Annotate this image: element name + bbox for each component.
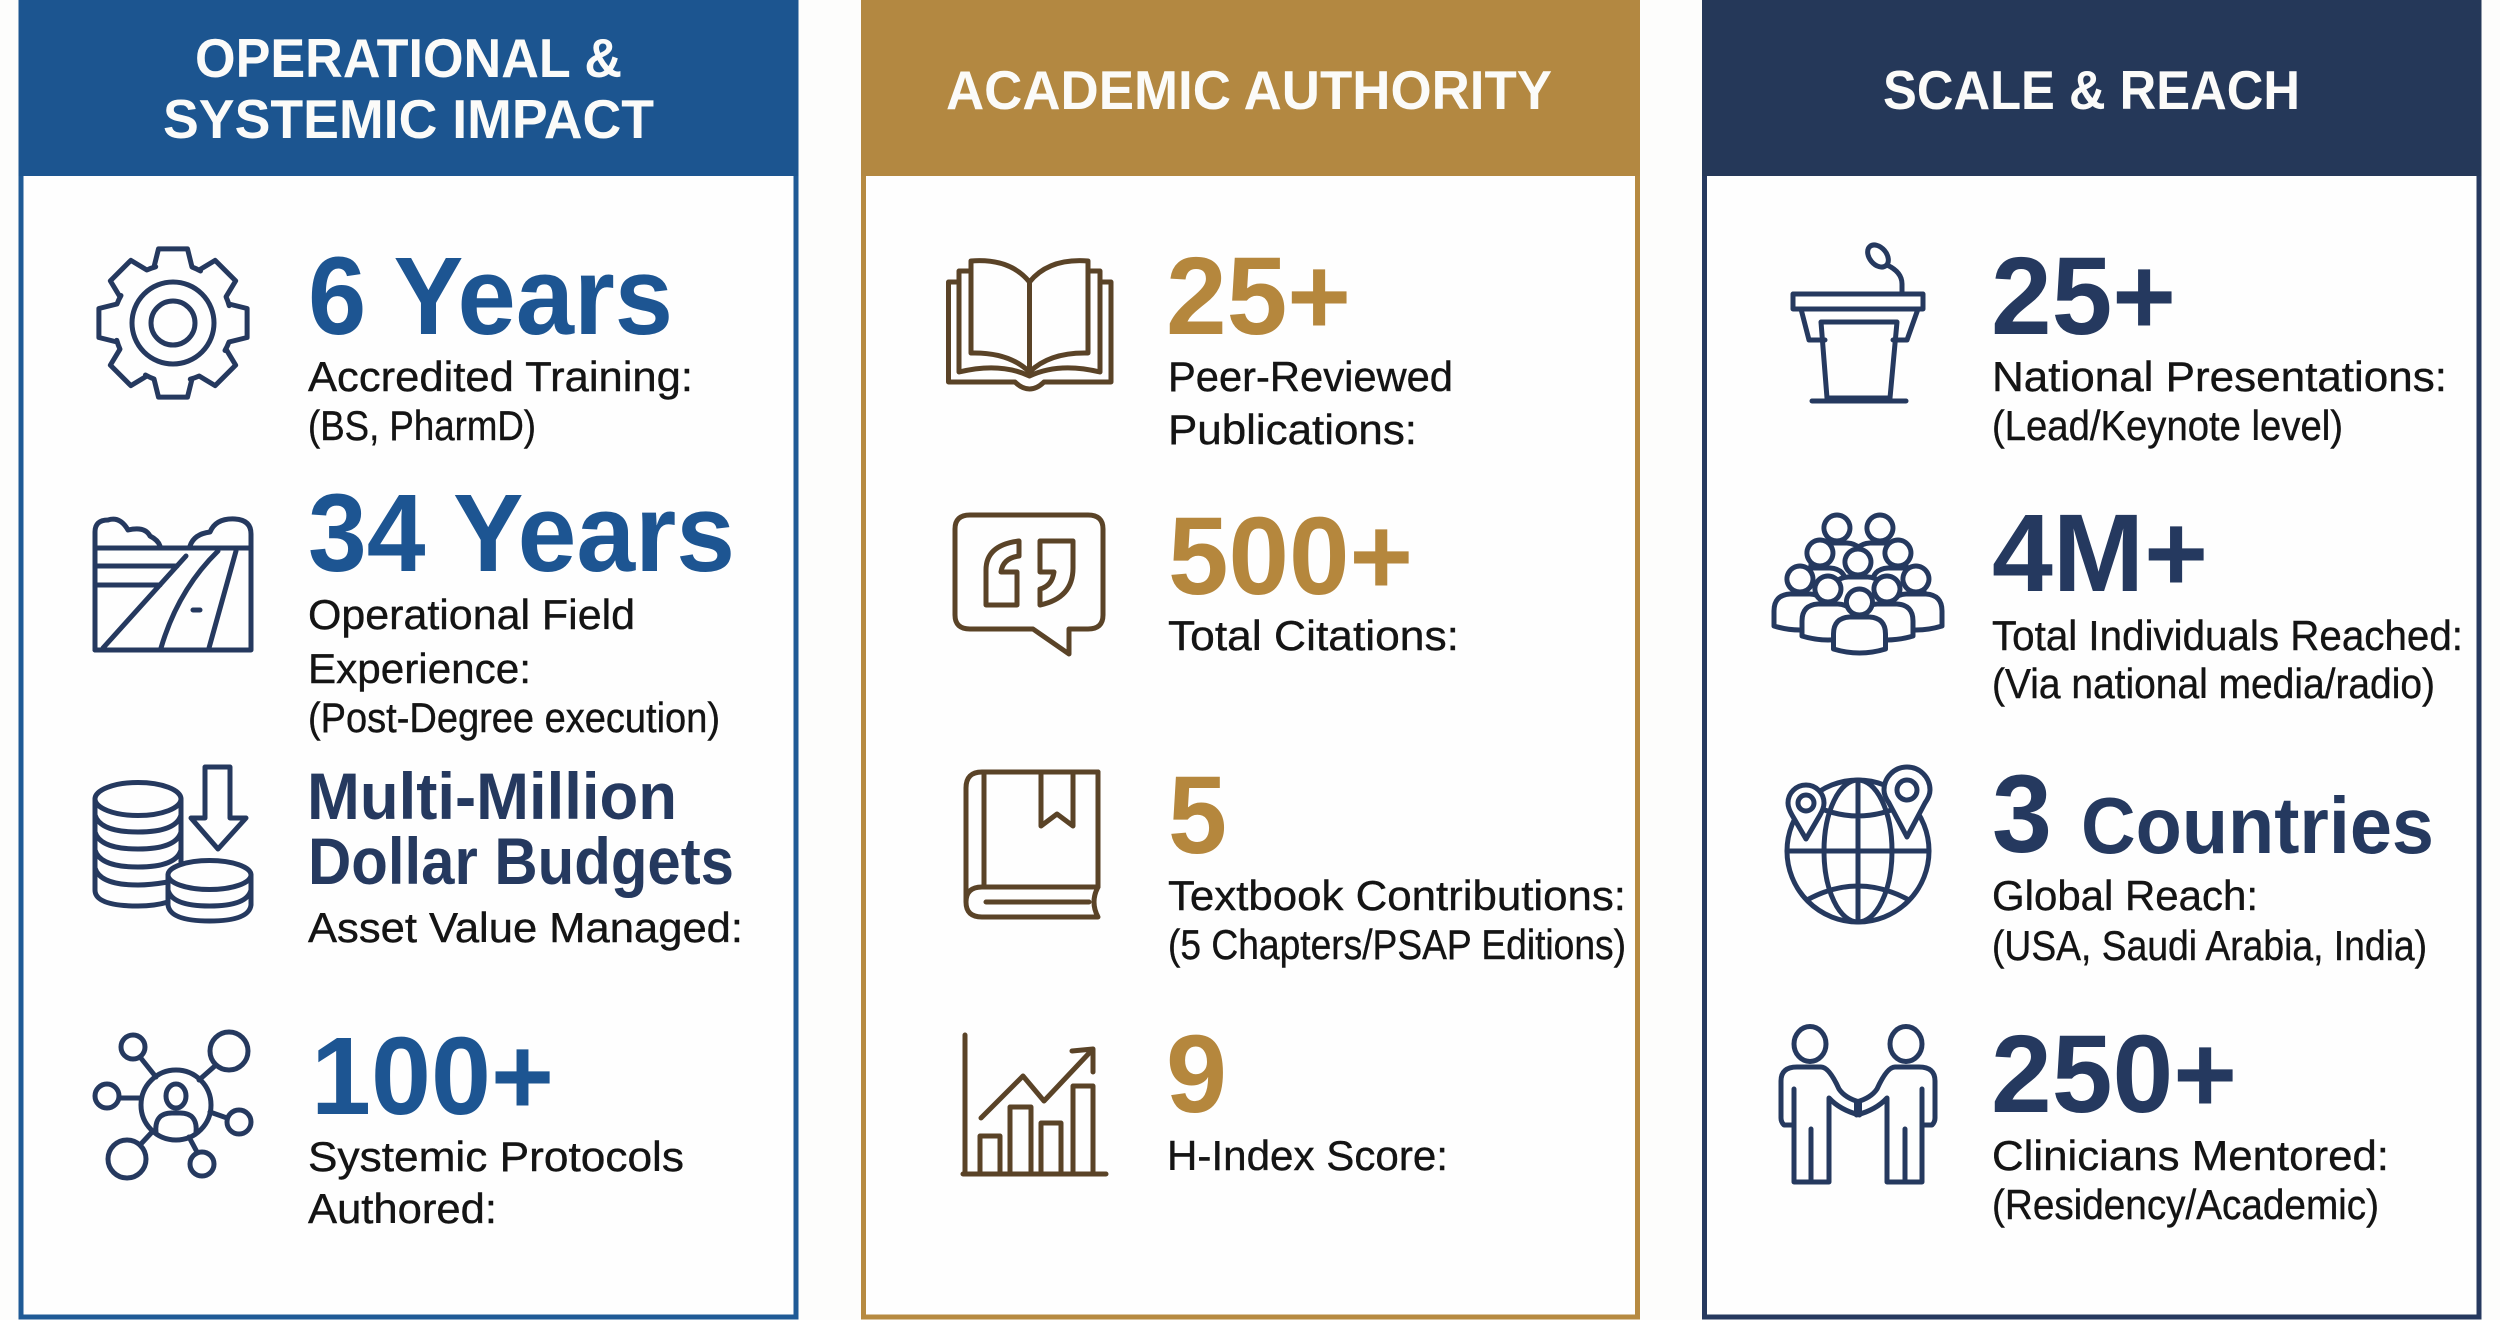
big number: 3 Countries: Countries: [2081, 781, 2434, 870]
label: accredited training: Accredited Training:: [308, 353, 693, 400]
label: peer-reviewed publications: Peer-Reviewed: [1168, 353, 1453, 400]
label: national presentations: (Lead/Keynote level): [1992, 402, 2343, 449]
big number: 34 Years: 34 Years: [308, 472, 735, 595]
stat: 500+ citations: [955, 495, 1459, 659]
label: operational field experience: Operational Field: [308, 591, 635, 638]
label: textbook contributions: Textbook Contributions:: [1168, 872, 1626, 919]
label: national presentations: National Presentations:: [1992, 353, 2447, 400]
big number: 100+: 100+: [311, 1015, 554, 1138]
stat: 5 textbook contributions: [966, 754, 1626, 968]
stat: 4M+ individuals: [1774, 492, 2463, 707]
label: textbook contributions: [1168, 872, 1626, 968]
label: operational field experience: [308, 591, 720, 741]
icon: two people shaking hands: [1781, 1026, 1935, 1182]
stat: 100+ systemic protocols: [95, 1015, 684, 1232]
icon: globe with map pins: [1787, 767, 1930, 922]
big number: 3 Countries: 3: [1992, 753, 2052, 876]
stat: 3 countries: [1787, 753, 2434, 969]
label: asset value managed: Asset Value Managed:: [308, 904, 743, 951]
icon: rising bar chart: [963, 1035, 1106, 1174]
stat: 6 years accredited training: [99, 235, 693, 449]
stat: 250+ clinicians: [1781, 1013, 2389, 1228]
icon: gear: [99, 249, 247, 397]
icon: open book: [948, 261, 1111, 389]
label: clinicians mentored: Clinicians Mentored:: [1992, 1132, 2389, 1179]
stat: 25+ presentations: [1793, 235, 2447, 449]
icon: crowd of people: [1774, 515, 1942, 653]
label: total citations: Total Citations:: [1168, 612, 1459, 659]
big number: 4M+: 4M+: [1992, 492, 2208, 615]
big number: 6 Years: 6 Years: [308, 235, 673, 358]
stat: 9 h-index: [963, 1013, 1448, 1179]
big number: 9: 9: [1166, 1013, 1227, 1136]
panel: scale and reach: [1702, 0, 2482, 1317]
big number: 3 Countries: [1992, 753, 2434, 876]
stat: 34 years field experience: [95, 472, 735, 741]
icon: quote speech bubble: [955, 515, 1103, 654]
icon: podium with microphone: [1793, 241, 1923, 401]
big number: multi-million dollar budgets: Dollar Budgets: [308, 824, 734, 898]
label: accredited training: (BS, PharmD): [308, 402, 536, 449]
icon: network with person: [95, 1032, 251, 1178]
stat: multi-million dollar budgets: [95, 759, 743, 951]
label: accredited training: [308, 353, 693, 449]
icon: road landscape: [95, 519, 251, 650]
label: h-index score: H-Index Score:: [1167, 1132, 1448, 1179]
heading: operational and systemic impact: SYSTEMIC IMPACT: [163, 88, 654, 150]
big number: 25+: 25+: [1166, 235, 1351, 358]
heading: scale and reach: SCALE & REACH: [1883, 59, 2300, 121]
label: textbook contributions: (5 Chapters/PSAP Editions): [1168, 921, 1626, 968]
label: operational field experience: (Post-Degree execution): [308, 694, 720, 741]
heading: academic authority: [861, 0, 1640, 176]
icon: closed book with bookmark: [966, 772, 1098, 917]
heading: operational and systemic impact: OPERATIONAL &: [195, 27, 622, 89]
label: total individuals reached: (Via national media/radio): [1992, 660, 2435, 707]
big number: 500+: 500+: [1168, 495, 1413, 618]
label: total individuals reached: Total Individuals Reached:: [1992, 612, 2463, 659]
label: global reach: Global Reach:: [1992, 872, 2258, 919]
big number: 250+: 250+: [1991, 1013, 2237, 1136]
big number: multi-million dollar budgets: [307, 759, 734, 898]
panel: operational and systemic impact: [18, 0, 798, 1317]
icon: coin stacks with arrow: [95, 767, 251, 921]
label: total individuals reached: [1992, 612, 2463, 707]
label: peer-reviewed publications: Publications:: [1168, 406, 1417, 453]
label: systemic protocols authored: [308, 1133, 684, 1232]
big number: 5: 5: [1168, 754, 1227, 877]
label: global reach: (USA, Saudi Arabia, India): [1992, 922, 2427, 969]
label: national presentations: [1992, 353, 2447, 449]
label: clinicians mentored: [1992, 1132, 2389, 1228]
heading: scale and reach: [1702, 0, 2482, 176]
label: peer-reviewed publications: [1168, 353, 1453, 453]
big number: 25+: 25+: [1991, 235, 2176, 358]
label: clinicians mentored: (Residency/Academic): [1992, 1181, 2379, 1228]
big number: multi-million dollar budgets: Multi-Million: [307, 759, 677, 833]
label: systemic protocols authored: Authored:: [308, 1185, 497, 1232]
heading: academic authority: ACADEMIC AUTHORITY: [946, 59, 1552, 121]
label: operational field experience: Experience:: [308, 645, 531, 692]
label: systemic protocols authored: Systemic Protocols: [308, 1133, 684, 1180]
stat: 25+ publications: [948, 235, 1453, 453]
label: global reach: [1992, 872, 2427, 969]
heading: operational and systemic impact: [18, 0, 798, 176]
panel: academic authority: [861, 0, 1640, 1317]
